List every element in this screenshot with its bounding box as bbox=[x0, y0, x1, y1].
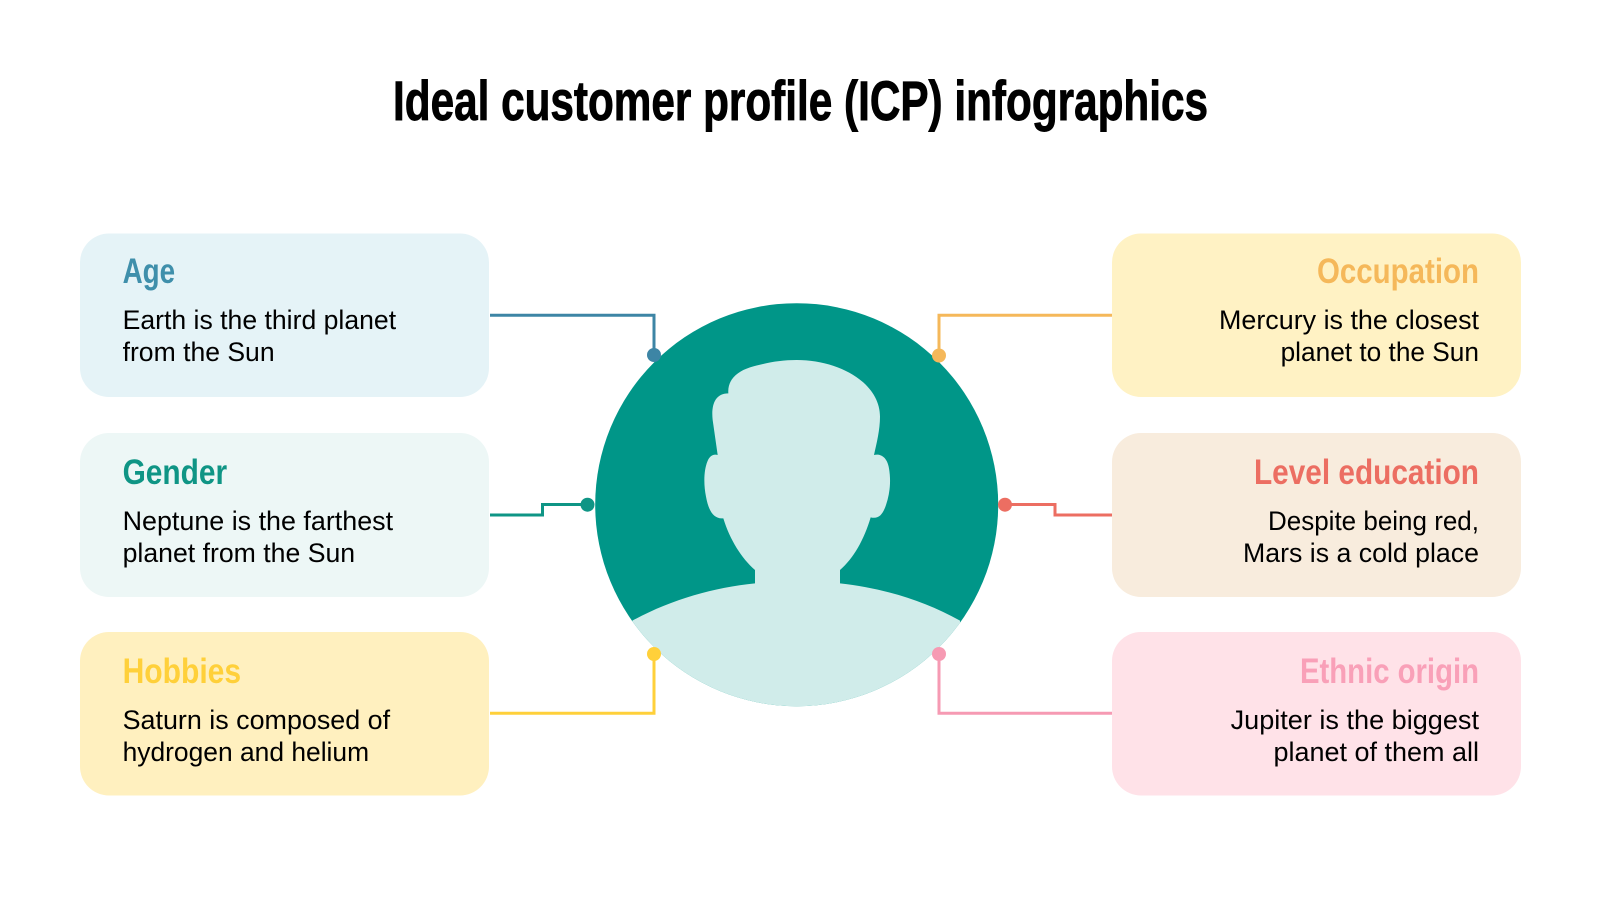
connector: Level education bbox=[998, 498, 1112, 515]
text: Hobbies description: hydrogen and helium bbox=[123, 737, 369, 767]
heading: Level education: Level education bbox=[1254, 453, 1479, 492]
text: Age description bbox=[123, 305, 397, 367]
connector: Ethnic origin bbox=[932, 647, 1112, 713]
text: Level education description bbox=[1243, 506, 1479, 568]
text: Gender description: Neptune is the farthest bbox=[123, 506, 394, 536]
text: Occupation description: planet to the Sun bbox=[1281, 337, 1479, 367]
connector: Occupation bbox=[932, 315, 1112, 362]
text: Occupation description bbox=[1219, 305, 1480, 367]
connector: Age bbox=[490, 315, 661, 362]
text: Occupation description: Mercury is the closest bbox=[1219, 305, 1480, 335]
text: Ethnic origin description bbox=[1231, 705, 1480, 767]
title: Ideal customer profile (ICP) infographics bbox=[393, 69, 1208, 132]
text: Ethnic origin description: planet of them all bbox=[1274, 737, 1479, 767]
text: Gender description: planet from the Sun bbox=[123, 538, 355, 568]
heading: Age: Age bbox=[123, 252, 175, 291]
panel: Occupation bbox=[1112, 234, 1521, 397]
text: Gender description bbox=[123, 506, 394, 568]
text: Ethnic origin description: Jupiter is the biggest bbox=[1231, 705, 1480, 735]
text: Level education description: Despite being red, bbox=[1268, 506, 1479, 536]
panel: Ethnic origin bbox=[1112, 632, 1521, 796]
connector: Gender bbox=[490, 498, 594, 515]
heading: Ethnic origin: Ethnic origin bbox=[1300, 652, 1479, 691]
central person icon bbox=[595, 303, 998, 747]
panel: Level education bbox=[1112, 433, 1521, 597]
connector: Hobbies bbox=[490, 647, 661, 713]
panel: Gender bbox=[80, 433, 489, 597]
text: Age description: from the Sun bbox=[123, 337, 275, 367]
text: Hobbies description: Saturn is composed of bbox=[123, 705, 391, 735]
text: Hobbies description bbox=[123, 705, 391, 767]
text: Level education description: Mars is a cold place bbox=[1243, 538, 1479, 568]
heading: Hobbies: Hobbies bbox=[123, 652, 241, 691]
heading: Occupation: Occupation bbox=[1317, 252, 1479, 291]
panel: Hobbies bbox=[80, 632, 489, 796]
text: Age description: Earth is the third planet bbox=[123, 305, 397, 335]
heading: Gender: Gender bbox=[123, 453, 227, 492]
panel: Age bbox=[80, 234, 489, 397]
